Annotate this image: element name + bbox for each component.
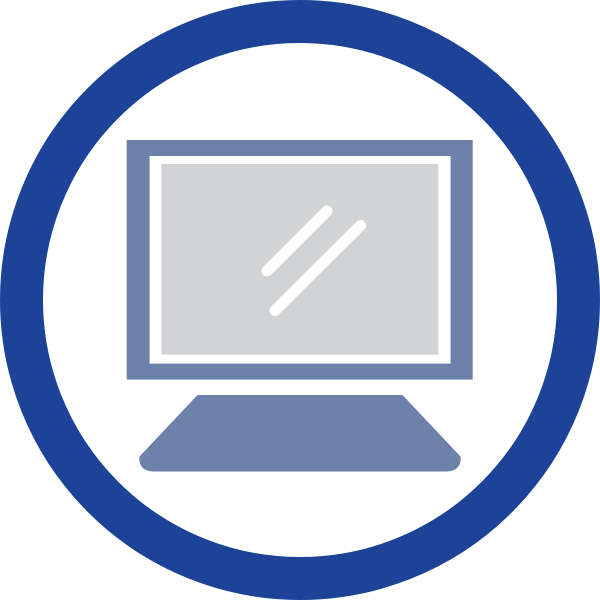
screen glare lines (267, 211, 360, 310)
monitor (127, 140, 473, 380)
monitor white bezel (150, 156, 451, 364)
monitor screen (161, 164, 438, 355)
monitor stand (139, 395, 461, 472)
monitor frame (127, 140, 473, 380)
